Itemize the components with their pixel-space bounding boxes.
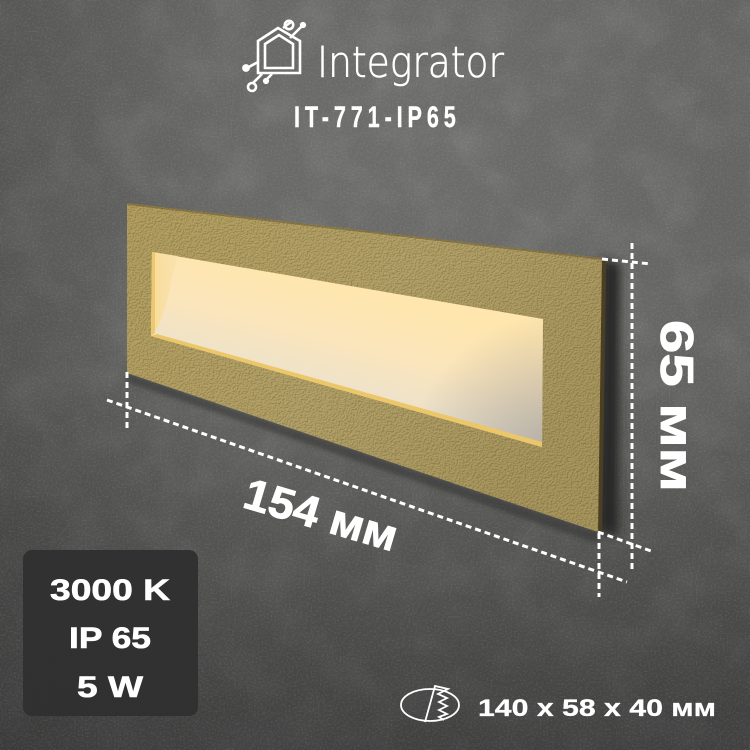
spec: power: 5 W xyxy=(77,671,144,704)
cut-out dimensions: 140 x 58 x 40 мм xyxy=(478,695,716,722)
bottom gold lip xyxy=(151,334,542,447)
width label: 154 мм xyxy=(238,469,404,561)
left gold lip xyxy=(151,252,155,336)
wall light fixture xyxy=(120,200,620,544)
logo wordmark: Integrator xyxy=(317,38,504,88)
spec: colour temperature: 3000 K xyxy=(50,574,170,607)
plate edge xyxy=(598,258,606,533)
icon: house with circuit traces xyxy=(243,21,305,91)
spec: ingress protection: IP 65 xyxy=(69,622,151,655)
logo: Integrator xyxy=(243,21,504,91)
height label: 65 мм xyxy=(651,320,703,492)
inner left reflector xyxy=(151,252,178,336)
faceplate pebble texture xyxy=(120,200,610,540)
model number: IT-771-IP65 xyxy=(294,99,461,134)
dimension lines xyxy=(107,243,651,597)
gold faceplate xyxy=(127,203,602,532)
top edge shade xyxy=(127,203,602,260)
spec panel xyxy=(23,550,198,716)
lit window xyxy=(151,252,543,447)
cast shadow xyxy=(598,258,620,536)
icon: cut-out hole xyxy=(401,686,459,722)
